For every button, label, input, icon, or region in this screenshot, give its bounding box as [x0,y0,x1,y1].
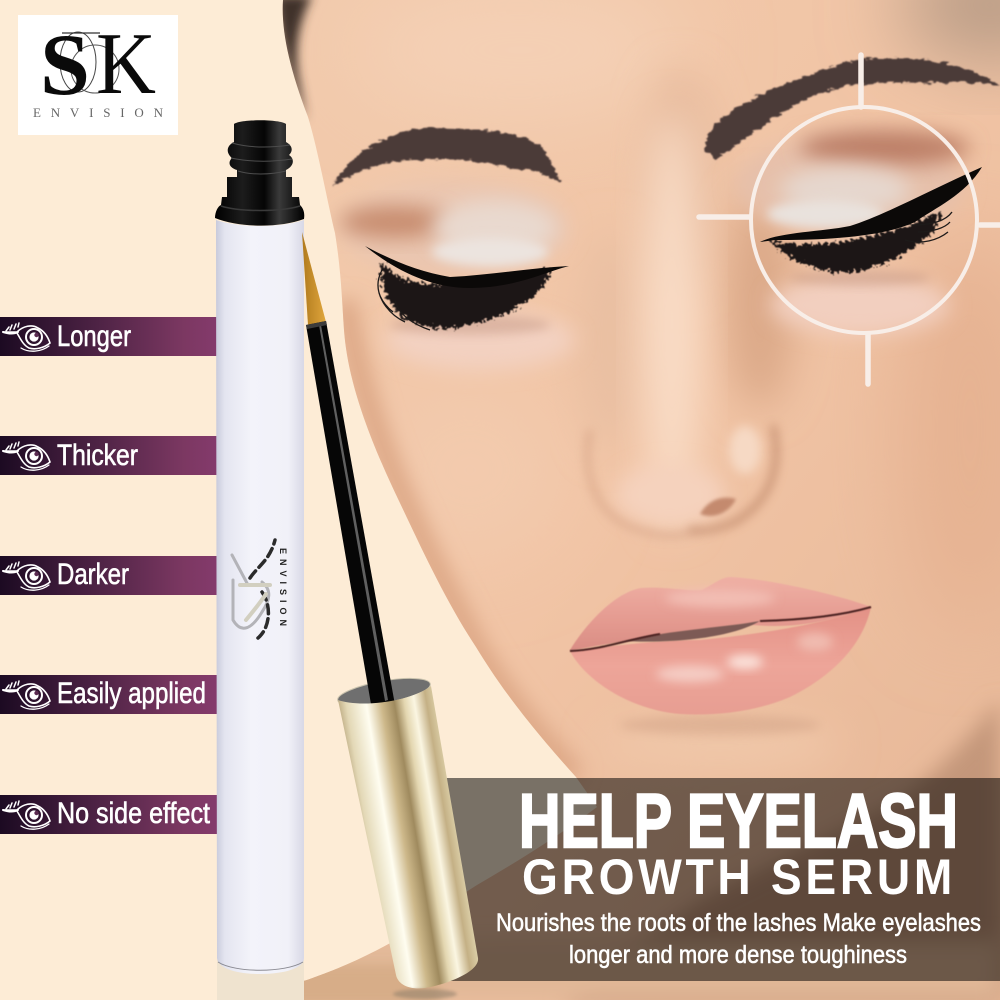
benefit bar: Longer: Longer [57,320,131,353]
benefit bar: No side effect [0,795,217,834]
model face photo [230,0,1000,1000]
target ring around eye [699,55,1000,384]
left eyelid and eyeshadow [340,180,570,276]
logo badge: K [96,16,156,113]
lips [620,715,820,735]
serum bottle [215,120,304,1000]
benefit bar: Longer [0,317,217,356]
left brow [333,128,560,187]
gold cap inner rim [336,673,432,711]
right brow [705,58,1000,160]
applicator brush [302,232,395,710]
neck shadow [560,700,1000,1000]
logo letters: S [40,17,90,114]
benefit bar: Easily applied: Easily applied [57,677,206,710]
gold cap [338,686,478,999]
left eye lashes [365,246,569,335]
black bottle neck [215,120,304,226]
description line two: longer and more dense toughiness [569,941,907,969]
benefit bar: Darker: Darker [57,558,129,591]
bottle logo [232,540,275,638]
right eye lashes [760,167,982,286]
nose [615,465,725,525]
sub heading: GROWTH SERUM [522,849,956,905]
right eyelid and eyeshadow [743,149,951,226]
logo wordmark: ENVISION [33,105,164,120]
benefit bar: Thicker: Thicker [57,439,138,472]
benefit bar: Thicker [0,436,217,475]
benefit bar: Easily applied [0,675,217,714]
benefit bar: No side effect: No side effect [57,797,211,830]
benefit bar: Darker [0,556,217,595]
text banner [430,778,1000,981]
logo badge [18,15,178,135]
hair [275,0,312,120]
bottle wordmark: ENVISION [278,548,288,626]
